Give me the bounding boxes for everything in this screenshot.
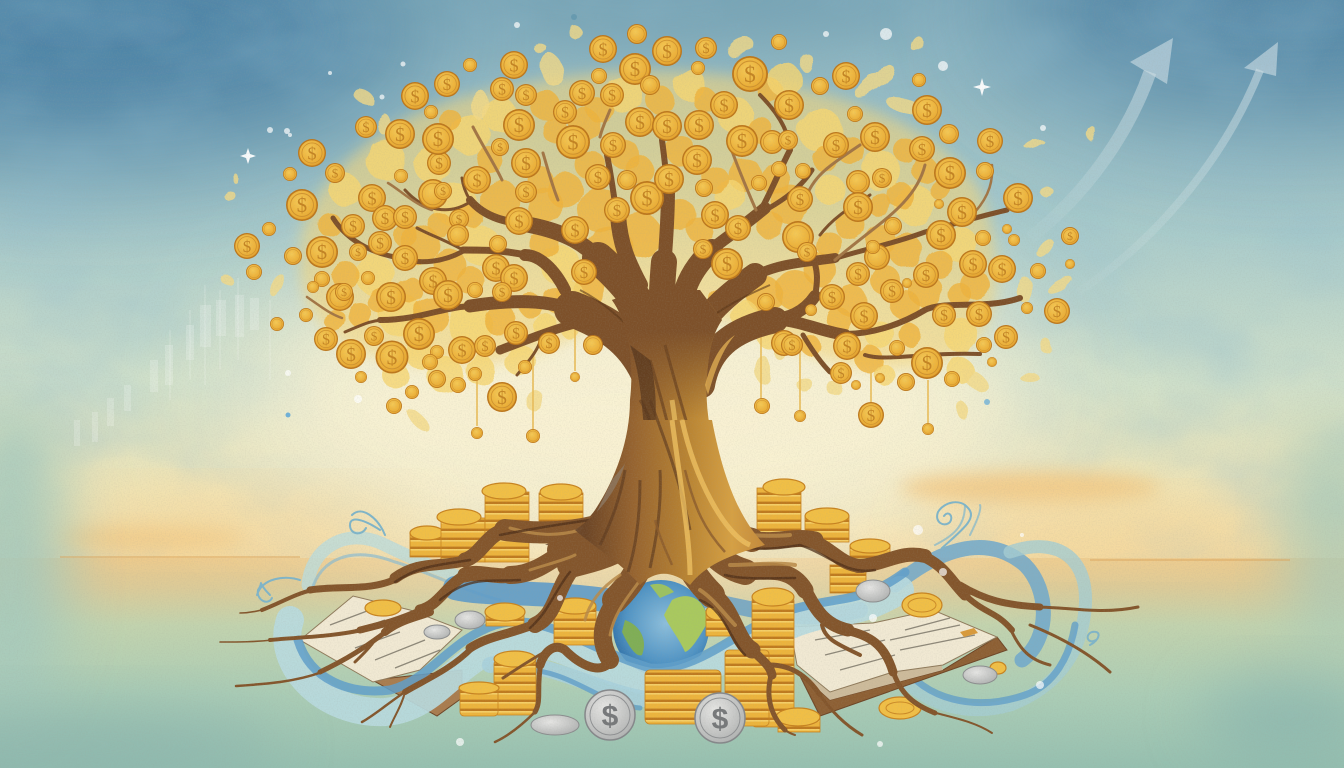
gold dollar coins on the tree: $ [401,249,409,268]
gold dollar coins on the tree: $ [456,212,463,226]
gold dollar coins on the tree: $ [433,128,443,151]
gold dollar coins on the tree: $ [387,345,398,369]
gold dollar coins on the tree: $ [744,62,756,88]
gold dollar coins on the tree: $ [630,58,640,81]
gold dollar coins on the tree: $ [376,235,384,252]
gold dollar coins on the tree: $ [481,339,489,355]
gold dollar coins on the tree: $ [986,132,994,151]
gold dollar coins on the tree: $ [796,190,804,209]
gold dollar coins on the tree: $ [561,104,569,121]
gold dollar coins on the tree: $ [355,246,361,259]
gold dollar coins on the tree: $ [853,198,863,219]
gold dollar coins on the tree: $ [362,120,370,136]
gold dollar coins on the tree: $ [443,286,453,307]
gold dollar coins on the tree: $ [1002,329,1010,346]
gold dollar coins on the tree: $ [842,336,852,356]
trunk base flare over the roots [575,400,765,585]
gold dollar coins on the tree: $ [975,305,983,324]
gold dollar coins on the tree: $ [664,170,674,191]
growth arrows [1030,38,1278,292]
gold dollar coins on the tree: $ [440,185,446,198]
coin stacks behind roots [410,479,890,593]
gold dollar coins on the tree: $ [922,352,932,375]
open ledger book right [790,610,1007,716]
gold dollar coins on the tree: $ [997,259,1007,279]
gold dollar coins on the tree: $ [381,209,389,228]
gold dollar coins on the tree: $ [472,170,482,190]
gold dollar coins on the tree: $ [940,307,948,324]
gold dollar coins on the tree: $ [804,244,811,260]
gold dollar coins on the tree: $ [594,168,602,187]
gold dollar coins on the tree: $ [859,306,869,326]
gold dollar coins on the tree: $ [395,125,405,146]
gold dollar coins on the tree: $ [317,241,327,264]
gold dollar coins on the tree: $ [457,340,467,360]
gold dollar coins on the tree: $ [694,116,704,137]
gold dollar coins on the tree: $ [491,258,501,278]
gold dollar coins on the tree: $ [443,75,451,94]
gold dollar coins on the tree: $ [662,42,672,63]
gold dollar coins on the tree: $ [719,95,729,115]
gold dollar coins on the tree: $ [509,55,519,75]
coin stacks front [365,588,1006,732]
gold dollar coins on the tree: $ [968,254,978,274]
gold dollar coins on the tree: $ [1067,230,1073,243]
gold dollar coins on the tree: $ [841,66,851,86]
gold dollar coins on the tree: $ [401,209,409,226]
gold dollar coins on the tree: $ [957,203,967,224]
gold dollar coins on the tree: $ [788,338,796,354]
blue ribbons back [257,502,1099,710]
gold dollar coins on the tree: $ [1053,302,1061,321]
gold dollar coins on the tree: $ [888,283,896,300]
gold dollar coins on the tree: $ [613,201,621,220]
gold dollar coins on the tree: $ [522,88,530,104]
gold dollar coins on the tree: $ [332,166,339,180]
gold dollar coins on the tree: $ [428,271,438,291]
gold dollar coins on the tree: $ [410,86,420,106]
gold dollar coins on the tree: $ [578,84,586,103]
gold dollar coins on the tree: $ [341,286,347,299]
gold dollar coins on the tree: $ [832,136,840,155]
gold dollar coins on the tree: $ [828,288,836,307]
gold dollar coins on the tree: $ [322,331,330,348]
gold dollar coins on the tree: $ [521,154,531,175]
gold dollar coins on the tree: $ [414,323,424,346]
tree trunk [545,290,765,548]
canopy foliage wash [221,25,1098,434]
gold dollar coins on the tree: $ [512,325,520,342]
gold dollar coins on the tree: $ [722,253,732,276]
gold dollar coins on the tree: $ [936,226,946,247]
gold dollar coins on the tree: $ [635,113,645,134]
gold dollar coins on the tree: $ [922,266,930,285]
gold dollar coins on the tree: $ [435,155,443,172]
gold dollar coins on the tree: $ [514,114,524,137]
gold dollar coins on the tree: $ [497,388,507,409]
gold dollar coins on the tree: $ [784,96,794,117]
gold dollar coins on the tree: $ [700,242,707,256]
gold dollar coins on the tree: $ [497,141,503,154]
gold dollar coins on the tree: $ [307,143,317,163]
gold dollar coins on the tree: $ [945,162,955,185]
gold dollar coins on the tree: $ [922,101,932,122]
gold dollar coins on the tree: $ [580,263,588,282]
gold dollar coins on the tree [234,24,1079,443]
gold dollar coins on the tree: $ [879,170,886,186]
gold dollar coins on the tree: $ [346,345,356,366]
gold dollar coins on the tree: $ [371,328,378,344]
gold dollar coins on the tree: $ [737,130,747,153]
gold dollar coins on the tree: $ [297,194,307,217]
gold dollar coins on the tree: $ [598,39,608,59]
gold dollar coins on the tree: $ [509,268,519,288]
gold dollar coins on the tree: $ [854,266,862,283]
globe [613,580,709,676]
gold dollar coins on the tree: $ [367,188,377,208]
gold dollar coins on the tree: $ [545,336,553,352]
gold dollar coins on the tree: $ [1013,189,1023,210]
gold dollar coins on the tree: $ [608,87,616,104]
gold dollar coins on the tree: $ [349,218,357,235]
gold dollar coins on the tree: $ [386,288,396,309]
gold dollar coins on the tree: $ [918,140,926,159]
gold dollar coins on the tree: $ [498,81,506,98]
gold dollar coins on the tree: $ [567,130,579,155]
open ledger book left [300,596,462,716]
faint candlestick chart [74,278,270,446]
gold dollar coins on the tree: $ [837,366,845,382]
flowing blue ribbon front [287,572,905,712]
gold dollar coins on the tree: $ [243,237,251,256]
sparkles and light dots [240,14,1046,747]
gold dollar coins on the tree: $ [609,136,617,155]
gold dollar coins on the tree: $ [870,128,880,149]
tree branches [307,95,1020,385]
gold dollar coins on the tree: $ [702,41,710,57]
gold dollar coins on the tree: $ [710,205,720,225]
tree roots [220,520,1138,742]
gold dollar coins on the tree: $ [785,132,792,148]
gold dollar coins on the tree: $ [570,220,580,240]
silver coins [424,580,997,743]
hanging coin threads [477,330,928,430]
gold dollar coins on the tree: $ [734,219,742,238]
gold dollar coins on the tree: $ [641,186,653,211]
gold dollar coins on the tree: $ [499,284,506,300]
gold dollar coins on the tree: $ [514,211,524,231]
gold dollar coins on the tree: $ [692,151,702,172]
silver coins: $ [712,703,729,736]
gold dollar coins on the tree: $ [522,185,530,201]
silver coins: $ [602,700,619,733]
gold dollar coins on the tree: $ [867,406,875,425]
gold dollar coins on the tree: $ [662,117,672,138]
